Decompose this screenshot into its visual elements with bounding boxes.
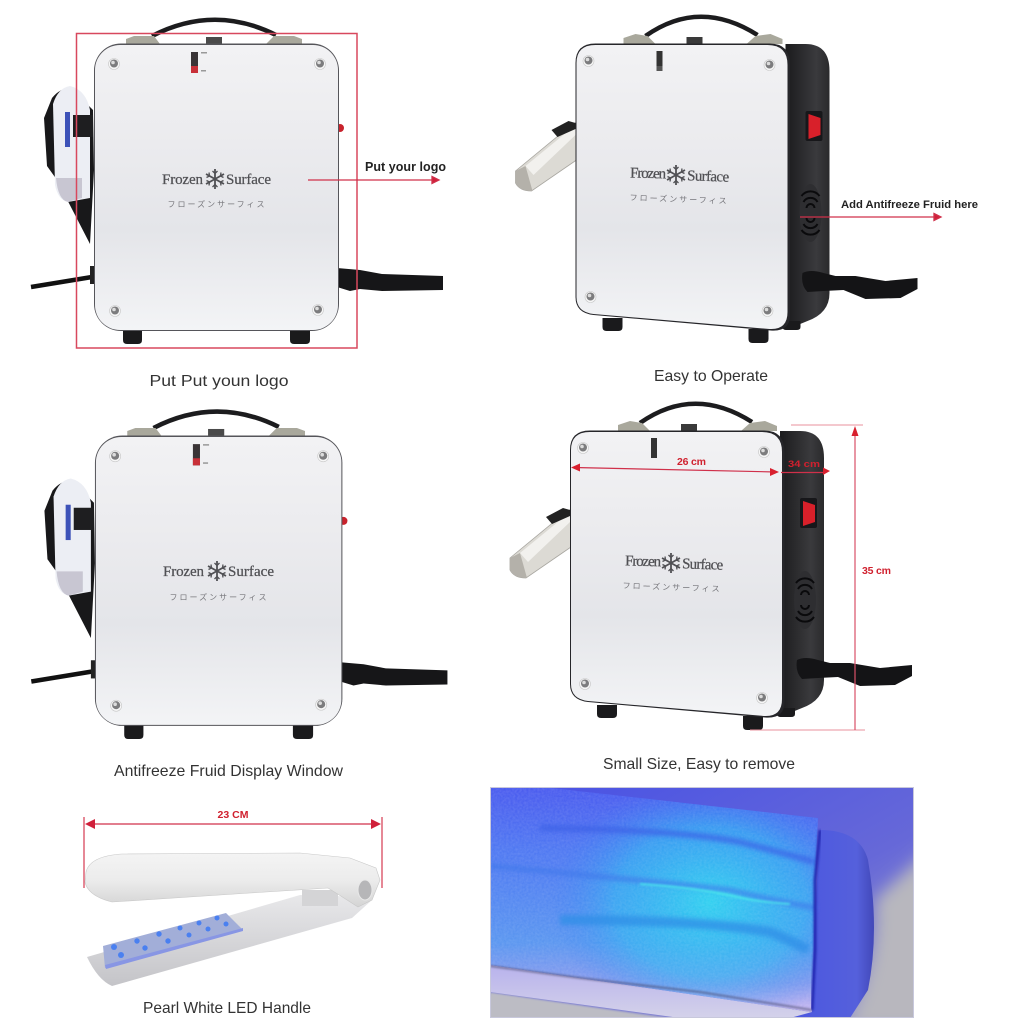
device logo: フローズンサーフィス	[168, 199, 266, 210]
device logo	[162, 169, 271, 210]
panel: put your logo	[31, 20, 446, 390]
caption: Put Put youn logo	[150, 373, 289, 390]
device angled view	[516, 17, 918, 343]
device logo	[629, 165, 730, 207]
caption: Antifreeze Fruid Display Window	[114, 763, 343, 780]
callout: add antifreeze: Add Antifreeze Fruid here	[841, 199, 978, 211]
panel: easy to operate	[516, 17, 978, 385]
device angled view	[510, 404, 912, 730]
red logo area frame	[76, 34, 357, 348]
device logo: Surface	[682, 556, 724, 574]
device front view	[31, 412, 447, 739]
foam right shadow edge	[812, 830, 820, 1010]
photo border	[490, 788, 914, 1018]
device logo: フローズンサーフィス	[622, 580, 722, 595]
dimension: 23 cm: 23 CM	[218, 809, 249, 821]
bright cyan ridge line	[640, 884, 790, 904]
LED plate	[103, 913, 243, 969]
photo background	[490, 787, 914, 1018]
dimension: height 35 cm: 35 cm	[862, 565, 891, 577]
panel: frozen surface photo	[491, 788, 913, 1017]
dimension: depth	[781, 459, 830, 475]
device logo: フローズンサーフィス	[170, 592, 268, 603]
arrow: fluid inlet	[800, 214, 941, 220]
callout: put your logo: Put your logo	[365, 160, 446, 174]
dimension: width 26 cm	[571, 456, 779, 476]
dark foam seam	[490, 966, 812, 1010]
handle lower arm	[87, 895, 372, 986]
device window	[651, 438, 657, 458]
handle hinge post	[302, 890, 338, 906]
grey table corner	[851, 854, 913, 1017]
panel: small size dimensions	[510, 404, 912, 773]
device logo: Frozen	[163, 564, 204, 580]
device logo: Frozen	[625, 553, 662, 570]
caption: Small Size, Easy to remove	[603, 756, 795, 773]
device front view	[31, 20, 443, 344]
arrow: to logo label	[308, 176, 439, 184]
device logo	[622, 553, 724, 595]
device logo: Surface	[228, 564, 274, 580]
foam body	[480, 780, 818, 1012]
dimension: depth: 34 cm	[788, 459, 820, 469]
panel: LED handle	[84, 809, 382, 1017]
grey lower left corner	[491, 992, 670, 1017]
device logo: Frozen	[630, 165, 667, 182]
device logo: Surface	[226, 172, 271, 188]
rounded end cap	[788, 830, 874, 1017]
panel: antifreeze display window	[31, 412, 447, 780]
dimension: height 35 cm	[750, 425, 891, 730]
caption: Pearl White LED Handle	[143, 1000, 311, 1017]
device logo: Frozen	[162, 172, 204, 188]
device logo: フローズンサーフィス	[629, 192, 729, 207]
device logo	[163, 561, 274, 603]
caption: Easy to Operate	[654, 368, 768, 385]
dimension: width 26 cm: 26 cm	[677, 456, 706, 468]
lower lavender band	[490, 965, 812, 1018]
dimension: 23 cm	[84, 809, 382, 888]
handle upper arm	[85, 853, 380, 907]
device logo: Surface	[687, 168, 730, 186]
hinge button	[358, 880, 372, 900]
foam ridges	[490, 828, 816, 950]
